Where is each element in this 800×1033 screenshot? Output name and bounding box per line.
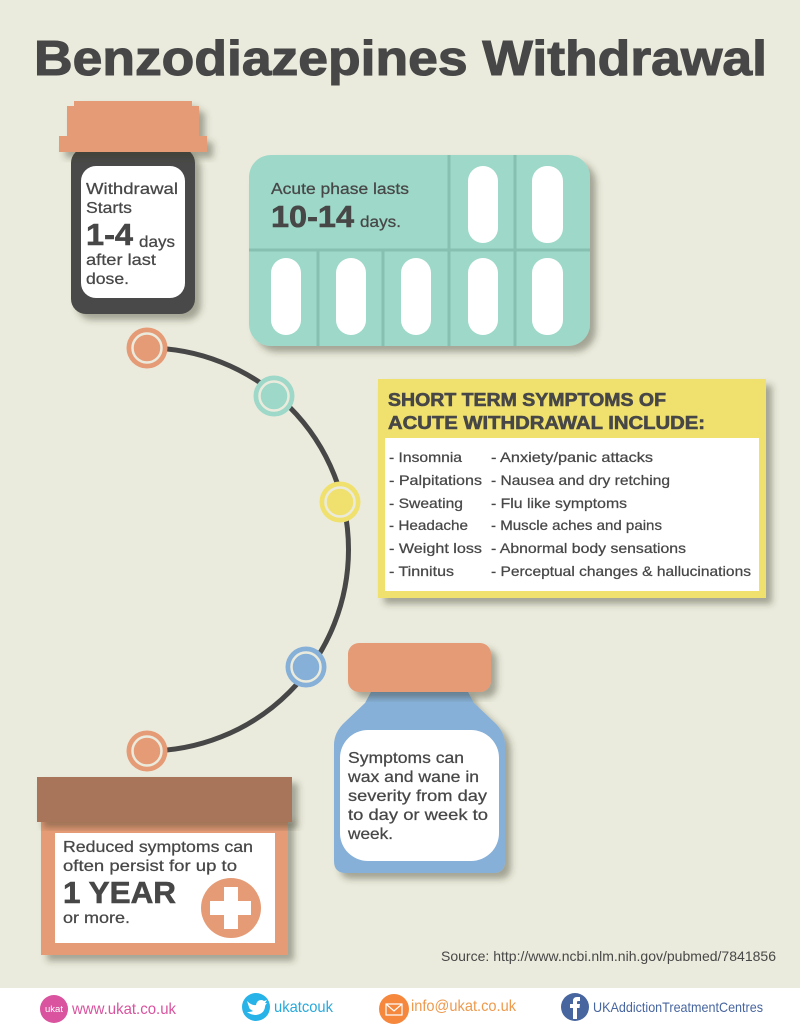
footer: [0, 988, 800, 1033]
twitter handle: ukatcouk: [274, 999, 334, 1016]
symptom list: column one: - Weight loss: [389, 540, 482, 556]
text: wax and wane: severity from day: [348, 788, 487, 805]
symptom list: column two: - Abnormal body sensations: [491, 540, 686, 556]
list background: [385, 438, 759, 591]
symptom list: column one: - Insomnia: [389, 449, 462, 465]
text: withdrawal starts: [86, 181, 178, 288]
symptoms heading: [388, 390, 705, 433]
text: withdrawal starts: Withdrawal: [86, 181, 178, 198]
text: acute phase: Acute phase lasts: [271, 181, 409, 198]
text: wax and wane: week.: [347, 826, 393, 843]
panel: blue bottle: [334, 643, 505, 873]
text: withdrawal starts: 1-4: [86, 217, 134, 252]
timeline curve: [147, 348, 348, 751]
text: withdrawal starts: Starts: [86, 200, 132, 217]
icon: bottle cap: [59, 101, 207, 152]
text: withdrawal starts: days: [139, 234, 175, 251]
footer background: [0, 988, 800, 1033]
text: reduced symptoms: often persist for up to: [63, 858, 237, 875]
source: Source: http://www.ncbi.nlm.nih.gov/pubmed/7841856: [441, 948, 776, 964]
timeline node: mint: [254, 376, 294, 416]
symptom list: column one: - Palpitations: [389, 472, 482, 488]
symptom list: column two: - Muscle aches and pains: [491, 517, 662, 533]
box lid: [37, 777, 292, 822]
text: withdrawal starts: dose.: [86, 271, 129, 288]
symptom list: column two: - Perceptual changes & hallucinations: [491, 563, 751, 579]
bottle label: [81, 166, 185, 298]
timeline node: orange bottom: [126, 730, 168, 772]
text: reduced symptoms: Reduced symptoms can: [63, 839, 253, 856]
box label: [55, 833, 275, 943]
text: wax and wane: to day or week to: [348, 807, 488, 824]
icon: facebook: [561, 993, 589, 1021]
icon: blue bottle cap: [348, 643, 491, 692]
text: reduced symptoms: 1 YEAR: [63, 875, 176, 910]
symptoms heading: SHORT TERM SYMPTOMS OF: [388, 390, 666, 410]
icon: email: [379, 994, 409, 1024]
panel: medicine box: [37, 777, 292, 955]
box body: [41, 815, 288, 955]
text: wax and wane: Symptoms can: [348, 750, 464, 767]
text: reduced symptoms: or more.: [63, 910, 130, 927]
text: acute phase: days.: [360, 214, 401, 231]
icon: ukat: [40, 995, 68, 1023]
symptom list: column two: [491, 449, 751, 579]
panel: pill bottle: [59, 101, 207, 314]
icon: medical plus: [201, 878, 261, 938]
icon: bottle body: [71, 148, 195, 314]
symptoms heading: ACUTE WITHDRAWAL INCLUDE:: [388, 413, 705, 433]
email link: info@ukat.co.uk: [411, 998, 517, 1015]
symptom list: column two: - Nausea and dry retching: [491, 472, 670, 488]
symptom list: column two: - Anxiety/panic attacks: [491, 449, 653, 465]
icon: twitter: [242, 993, 270, 1021]
facebook page: UKAddictionTreatmentCentres: [593, 999, 763, 1015]
symptom list: column two: - Flu like symptoms: [491, 495, 627, 511]
blister dividers: [249, 155, 590, 346]
panel: short term symptoms: [378, 379, 766, 598]
title: Benzodiazepines Withdrawal: [34, 32, 767, 86]
blister card: [249, 155, 590, 346]
text: wax and wane: wax and wane in: [347, 769, 479, 786]
panel: blister pack: [249, 155, 590, 346]
timeline node: blue: [286, 646, 326, 688]
symptom list: column one: - Headache: [389, 517, 468, 533]
text: wax and wane: [347, 750, 488, 843]
timeline node: orange top: [126, 328, 168, 368]
timeline node: yellow: [320, 482, 360, 522]
text: withdrawal starts: after last: [86, 252, 157, 269]
symptom list: column one: [389, 449, 482, 579]
icon: blue bottle body: [334, 690, 505, 873]
website link: www.ukat.co.uk: [71, 1001, 177, 1018]
yellow card: [378, 379, 766, 598]
icon: pills: [271, 166, 563, 335]
symptom list: column one: - Sweating: [389, 495, 463, 511]
bottle label: [340, 730, 499, 861]
text: acute phase: 10-14: [271, 199, 355, 234]
text: acute phase: [271, 181, 409, 234]
symptom list: column one: - Tinnitus: [389, 563, 454, 579]
icon: ukat: ukat: [45, 1004, 64, 1014]
text: reduced symptoms: [63, 839, 253, 927]
